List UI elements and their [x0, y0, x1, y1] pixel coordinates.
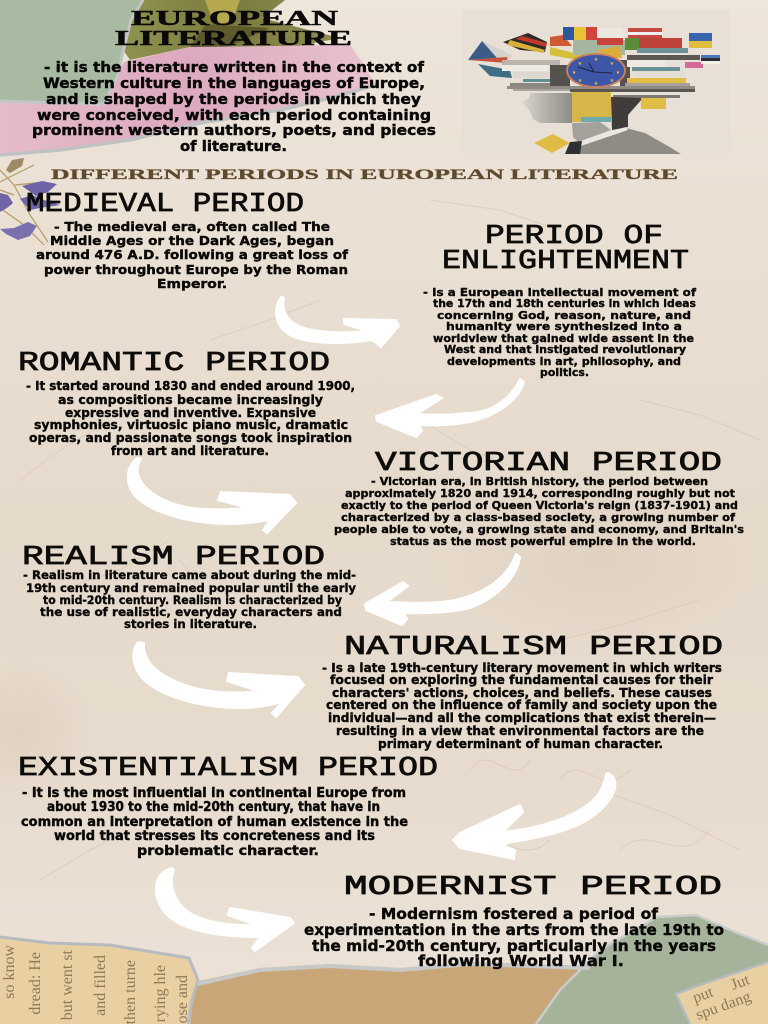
text: victorian: people able to vote, a growing state and economy, and Britain's	[334, 523, 744, 536]
panel: realism period	[22, 543, 356, 631]
text: enlightenment: humanity were synthesized into a	[446, 320, 682, 333]
torn book page text	[1, 945, 753, 1024]
text: realism: the use of realistic, everyday characters and	[40, 605, 342, 619]
text: modernist: following World War I.	[418, 952, 624, 970]
text: enlightenment	[423, 286, 696, 379]
text: naturalism: individual—and all the complications that exist therein—	[328, 711, 716, 725]
heading: enlightenment	[442, 222, 689, 277]
text: romantic: from art and literature.	[111, 444, 269, 458]
torn book page text: spu dang	[694, 988, 753, 1024]
text: existentialism	[21, 786, 408, 859]
arrow: existentialism to modernist	[156, 868, 294, 951]
title	[115, 6, 352, 50]
intro text: were conceived, with each period containing	[37, 108, 431, 124]
torn book page text: Jut	[729, 971, 752, 994]
text: romantic: expressive and inventive. Expansive	[65, 406, 316, 420]
clock with EU stars: ★	[572, 70, 577, 76]
text: realism: stories in literature.	[124, 617, 257, 631]
text: enlightenment: politics.	[540, 366, 589, 379]
text: medieval: Middle Ages or the Dark Ages, began	[50, 234, 334, 248]
text: victorian: - Victorian era, in British history, the period between	[371, 475, 708, 488]
text: existentialism: common an interpretation of human existence in the	[21, 815, 408, 830]
text: naturalism: resulting in a view that environmental factors are the	[336, 724, 704, 738]
text: existentialism: - It is the most influential in continental Europe from	[22, 786, 406, 801]
title: EUROPEAN	[131, 6, 338, 30]
text: medieval: - The medieval era, often called The	[54, 220, 330, 234]
text: enlightenment: worldview that gained wide assent in the	[433, 332, 694, 345]
text: naturalism: focused on exploring the fundamental causes for their	[330, 673, 713, 687]
heading: modernist: MODERNIST PERIOD	[344, 873, 722, 903]
intro text: prominent western authors, poets, and pieces	[32, 123, 436, 139]
torn paper collage: top left	[0, 0, 376, 155]
clock with EU stars: ★	[616, 70, 621, 76]
image: head with books and European flags	[462, 10, 730, 154]
text: medieval: power throughout Europe by the Roman	[44, 263, 348, 277]
torn book page text: so know	[1, 945, 18, 999]
arrow: enlightenment to romantic	[376, 379, 524, 437]
heading: victorian: VICTORIAN PERIOD	[375, 449, 722, 479]
heading: existentialism: EXISTENTIALISM PERIOD	[18, 754, 438, 784]
text: modernist: the mid-20th century, particularly in the years	[312, 937, 716, 955]
torn book page text: and filled	[92, 955, 109, 1016]
text: romantic: operas, and passionate songs took inspiration	[29, 431, 352, 445]
text: enlightenment: West and that instigated revolutionary	[444, 343, 686, 356]
heading: medieval: MEDIEVAL PERIOD	[26, 190, 304, 220]
text: modernist: - Modernism fostered a period of	[369, 905, 658, 923]
title: LITERATURE	[115, 26, 352, 50]
panel: enlightenment	[423, 222, 696, 379]
panel: medieval period	[26, 190, 349, 291]
text: naturalism: centered on the influence of family and society upon the	[326, 698, 717, 712]
intro text	[32, 60, 436, 155]
text: victorian: characterized by a class-based society, a growing number of	[341, 511, 735, 524]
stacked books	[478, 48, 700, 98]
clock with EU stars: ★	[594, 57, 599, 63]
arrow: medieval to enlightenment	[276, 297, 399, 347]
flags fanned above the head	[468, 27, 720, 68]
panel: naturalism period	[322, 633, 723, 751]
text: naturalism: - Is a late 19th-century literary movement in which writers	[322, 661, 722, 675]
text: modernist: experimentation in the arts from the late 19th to	[304, 921, 724, 939]
text: romantic	[26, 379, 355, 458]
text: realism: - Realism in literature came about during the mid-	[23, 568, 356, 582]
intro text: and is shaped by the periods in which they	[46, 92, 421, 108]
intro text: of literature.	[180, 139, 287, 155]
text: existentialism: problematic character.	[137, 844, 319, 859]
text: enlightenment: the 17th and 18th centuries in which ideas	[433, 297, 696, 310]
text: victorian: approximately 1820 and 1914, corresponding roughly but not	[345, 487, 735, 500]
torn book page text: then turne	[122, 960, 139, 1024]
arrow: naturalism to existentialism	[453, 773, 615, 859]
text: realism: 19th century and remained popular until the early	[26, 581, 356, 595]
text: medieval	[36, 220, 349, 291]
text: romantic: - It started around 1830 and ended around 1900,	[26, 379, 355, 393]
arrow: romantic to victorian	[128, 458, 296, 533]
torn book page text: put	[691, 984, 716, 1007]
icon: purple flowers	[0, 158, 60, 245]
heading: enlightenment: ENLIGHTENMENT	[442, 247, 689, 277]
panel: romantic period	[18, 349, 355, 458]
intro text: - it is the literature written in the context of	[44, 60, 425, 76]
text: enlightenment: developments in art, philosophy, and	[447, 355, 681, 368]
clock with EU stars	[566, 53, 626, 88]
intro text: Western culture in the languages of Europe,	[43, 76, 425, 92]
clock with EU stars: ★	[610, 61, 615, 67]
torn paper collage: bottom	[0, 915, 768, 1024]
clock with EU stars: ★	[578, 78, 583, 84]
text: modernist	[304, 905, 724, 970]
text: realism	[23, 568, 356, 631]
text: naturalism: primary determinant of human character.	[378, 737, 663, 751]
clock with EU stars: ★	[594, 81, 599, 87]
heading: enlightenment: PERIOD OF	[485, 222, 663, 252]
clock with EU stars: ★	[578, 61, 583, 67]
heading: naturalism: NATURALISM PERIOD	[344, 633, 723, 663]
text: naturalism	[322, 661, 722, 751]
section heading: DIFFERENT PERIODS IN EUROPEAN LITERATURE	[51, 167, 678, 183]
text: enlightenment: - Is a European intellectual movement of	[423, 286, 696, 299]
torn book page text: but went st	[59, 949, 76, 1020]
torn book page text: ose and	[174, 975, 191, 1023]
text: romantic: as compositions became increasingly	[58, 393, 323, 407]
arrow: realism to naturalism	[133, 642, 304, 717]
heading: realism: REALISM PERIOD	[22, 543, 325, 573]
heading: romantic: ROMANTIC PERIOD	[18, 349, 330, 379]
clock with EU stars: ★	[610, 78, 615, 84]
text: existentialism: about 1930 to the mid-20th century, that have in	[47, 800, 380, 815]
torn book page text: rying hle	[152, 965, 169, 1022]
collage portrait	[522, 92, 681, 154]
torn book page text: dread: He	[27, 952, 44, 1015]
text: victorian: status as the most powerful empire in the world.	[390, 535, 696, 548]
text: medieval: Emperor.	[157, 277, 227, 291]
text: existentialism: world that stresses its concreteness and its	[54, 829, 375, 844]
text: victorian: exactly to the period of Queen Victoria's reign (1837-1901) and	[341, 499, 738, 512]
text: realism: to mid-20th century. Realism is characterized by	[43, 593, 342, 607]
text: victorian	[334, 475, 744, 548]
panel: existentialism period	[18, 754, 438, 859]
text: romantic: symphonies, virtuosic piano music, dramatic	[34, 418, 348, 432]
text: enlightenment: concerning God, reason, nature, and	[437, 309, 691, 322]
text: naturalism: characters' actions, choices, and beliefs. These causes	[332, 686, 712, 700]
text: medieval: around 476 A.D. following a great loss of	[36, 248, 349, 262]
panel: victorian period	[334, 449, 744, 548]
panel: modernist period	[304, 873, 724, 970]
arrow: victorian to realism	[365, 554, 520, 625]
